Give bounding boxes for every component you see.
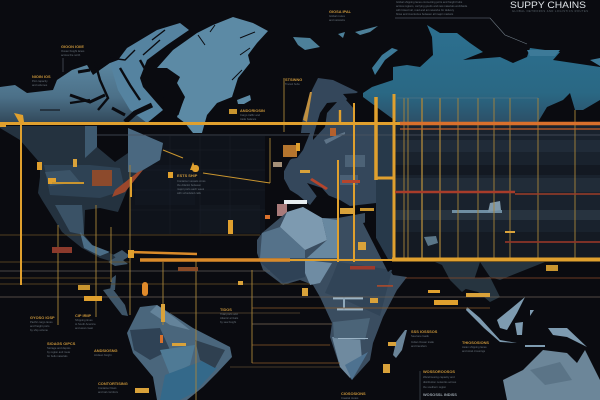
thin vertical routes xyxy=(58,78,575,400)
callout: Pacific label two: CIP IRIIP xyxy=(75,313,92,318)
land: Australia xyxy=(503,350,600,400)
title: Supply Chains: SUPPY CHAINS xyxy=(510,0,586,11)
callout: Peru coast label: ANDSIOSNG xyxy=(94,348,118,353)
land: South America xyxy=(127,305,232,400)
callout: Atlantic east label xyxy=(220,307,239,324)
land: Europe accents xyxy=(265,92,365,219)
callout: Pacific label one: and freight ports xyxy=(30,324,50,328)
callout: top centre text panel: with linked rail, road and air networks for delivery xyxy=(396,8,455,12)
panel: Atlantic ocean grid xyxy=(130,136,265,234)
callout: Pacific label two: to South America xyxy=(75,322,96,326)
callout: Africa south label xyxy=(341,391,366,400)
panel: dark grid over Asia xyxy=(376,124,600,260)
land: Europe dark seas xyxy=(270,93,358,200)
callout: top centre text panel: Global shipping lanes connecting ports and freight hubs xyxy=(396,0,463,4)
land: Greenland xyxy=(157,17,268,133)
callout: Indian Ocean west label: SSS IOSSSOS xyxy=(411,329,438,334)
orange and red eastbound routes xyxy=(395,124,600,242)
callout: Peru coast label xyxy=(94,348,118,357)
land: North America south xyxy=(0,126,163,263)
land: North America facets xyxy=(44,126,163,256)
land: Canadian Arctic xyxy=(0,23,189,125)
callout: mid Atlantic label with icon: major ports each week xyxy=(177,187,205,191)
thin horizontal routes xyxy=(0,135,600,367)
land: Central America and Caribbean xyxy=(103,250,130,316)
callout: Iceland label: Transit hubs xyxy=(285,82,300,86)
callout: South Pacific lower label xyxy=(98,381,128,394)
callout: Africa south label: Coastal routes xyxy=(341,396,359,400)
callout: Pacific label one: by ship volume xyxy=(30,328,48,332)
land: Red Sea gap xyxy=(363,222,393,272)
land: South America facets xyxy=(130,305,225,400)
callout: South Pacific label: Storage and depots xyxy=(47,346,71,350)
callout: Atlantic east label: by sea freight xyxy=(220,320,236,324)
callout: mid Atlantic label with icon: ESTS SHIP xyxy=(177,173,198,178)
callout: Alaska label: Ocean freight lanes xyxy=(61,49,85,53)
land: Europe and Scandinavia xyxy=(282,78,376,206)
callout: Atlantic east label: Tidal ports and xyxy=(220,312,238,316)
land: Russia and north Asia xyxy=(363,25,600,122)
callout: Indian Ocean west label: and transfers xyxy=(411,344,427,348)
callout: North Atlantic label: Cargo traffic and xyxy=(240,113,260,117)
callout: Canada west label xyxy=(32,74,51,87)
callout: Canada west label: NIOIN IOS xyxy=(32,74,51,79)
callout: Arctic north label: Global routes xyxy=(329,14,346,18)
callout: mid Atlantic label with icon: the Atlantic between xyxy=(177,183,202,187)
callout: mid Atlantic label with icon: with scheduled calls xyxy=(177,191,202,195)
callout: Pacific label two xyxy=(75,313,96,330)
callout: Atlantic east label: Atlantic arrivals xyxy=(220,316,239,320)
callout: Pacific label one: Pacific cargo lanes xyxy=(30,320,53,324)
callout: Alaska label: across the north xyxy=(61,53,81,57)
callout: Atlantic east label: TIDOS xyxy=(220,307,232,312)
callout: Arctic north label xyxy=(329,9,352,22)
callout: South Pacific lower label: CONTORTISING xyxy=(98,381,128,386)
callout: Alaska label: GIOON IOIIE xyxy=(61,44,84,49)
callout: Pacific label one: GYOSO IOSP xyxy=(30,315,55,320)
callout: Africa south label: CIOSOSIONS xyxy=(341,391,366,396)
callout: top centre text panel: across regions, carrying goods and raw materials worldwide xyxy=(396,4,468,8)
callout: Indian Ocean south label: the southern region xyxy=(423,385,447,389)
callout: Arctic north label: and networks xyxy=(329,18,346,22)
callout: Indian Ocean west label: Sea lane loads xyxy=(411,334,429,338)
callout: Pacific label two: and west coast xyxy=(75,326,93,330)
title: subtitle: GLOBAL NETWORKS AND LOGISTICS ROUTES xyxy=(512,9,588,13)
map markers: amber and red nodes xyxy=(0,113,558,393)
land: Arctic islands xyxy=(372,48,600,75)
land: Svalbard and archipelago xyxy=(293,26,378,50)
land: Greenland fjords xyxy=(178,25,255,115)
callout: Indian Ocean east label: and strait crossings xyxy=(462,349,486,353)
callout: North Atlantic label xyxy=(229,108,265,121)
callout: Indian Ocean south label: WOSSOROOSOS xyxy=(423,369,455,374)
land: Iceland xyxy=(237,95,251,104)
callout: Iceland label: STSINNG xyxy=(285,77,302,82)
land: Canadian water channels xyxy=(40,30,165,122)
callout: mid Atlantic label with icon xyxy=(177,162,206,195)
land: Indonesia and Philippines xyxy=(466,297,587,347)
land: Africa xyxy=(257,207,407,380)
callout: South Pacific label: SIOAGS OIPCS xyxy=(47,341,76,346)
callout: South Pacific label: by region and route xyxy=(47,350,71,354)
thick amber trunk routes xyxy=(0,94,600,285)
callout: South Pacific lower label: Container flows xyxy=(98,386,117,390)
callout: Alaska label xyxy=(61,44,85,72)
callout: Canada west label: and volumes xyxy=(32,83,48,87)
callout: North Atlantic label: ANDORIOSIN xyxy=(240,108,265,113)
callout: Indian Ocean west label xyxy=(411,329,438,348)
callout: Indian Ocean south label xyxy=(420,369,457,400)
callout: Peru coast label: Andean freight xyxy=(94,353,112,357)
land: Africa facets xyxy=(260,207,393,380)
callout: top centre text panel: flows and inventories between all major markets xyxy=(396,12,454,16)
callout: Indian Ocean east label: Asian shipping lanes xyxy=(462,345,487,349)
callout: South Pacific label: for bulk materials xyxy=(47,354,68,358)
callout: top centre text panel xyxy=(396,0,468,16)
callout: Iceland label xyxy=(285,77,302,86)
callout: Canada west label: Port capacity xyxy=(32,79,48,83)
callout: Indian Ocean south label: Warehousing capacity and xyxy=(423,375,455,379)
callout: South Pacific label xyxy=(47,341,76,358)
icon: cargo cap xyxy=(190,162,196,170)
top-right callout leader xyxy=(395,18,527,44)
callout: Pacific label two: Shipping times xyxy=(75,318,93,322)
title block xyxy=(510,0,588,13)
land: Australia facets xyxy=(530,362,572,385)
land: Madagascar xyxy=(393,330,407,358)
callout: Indian Ocean east label: THIOSOSIONS xyxy=(462,340,489,345)
callout: Indian Ocean east label xyxy=(462,340,489,353)
callout: Indian Ocean south label: distribution networks across xyxy=(423,380,457,384)
callout: Indian Ocean west label: Indian Ocean trade xyxy=(411,340,434,344)
callout: Indian Ocean south label: WOSOSSL INDISS xyxy=(423,392,457,397)
callout: Arctic north label: GIOSA IPAL xyxy=(329,9,352,14)
callout: South Pacific lower label: and rail corridors xyxy=(98,390,119,394)
callout: Pacific label one xyxy=(30,315,55,332)
callout: mid Atlantic label with icon: Container vessels cross xyxy=(177,179,206,183)
callout: North Atlantic label: trade balance xyxy=(240,117,257,121)
land: India and Southeast Asia xyxy=(435,262,545,302)
